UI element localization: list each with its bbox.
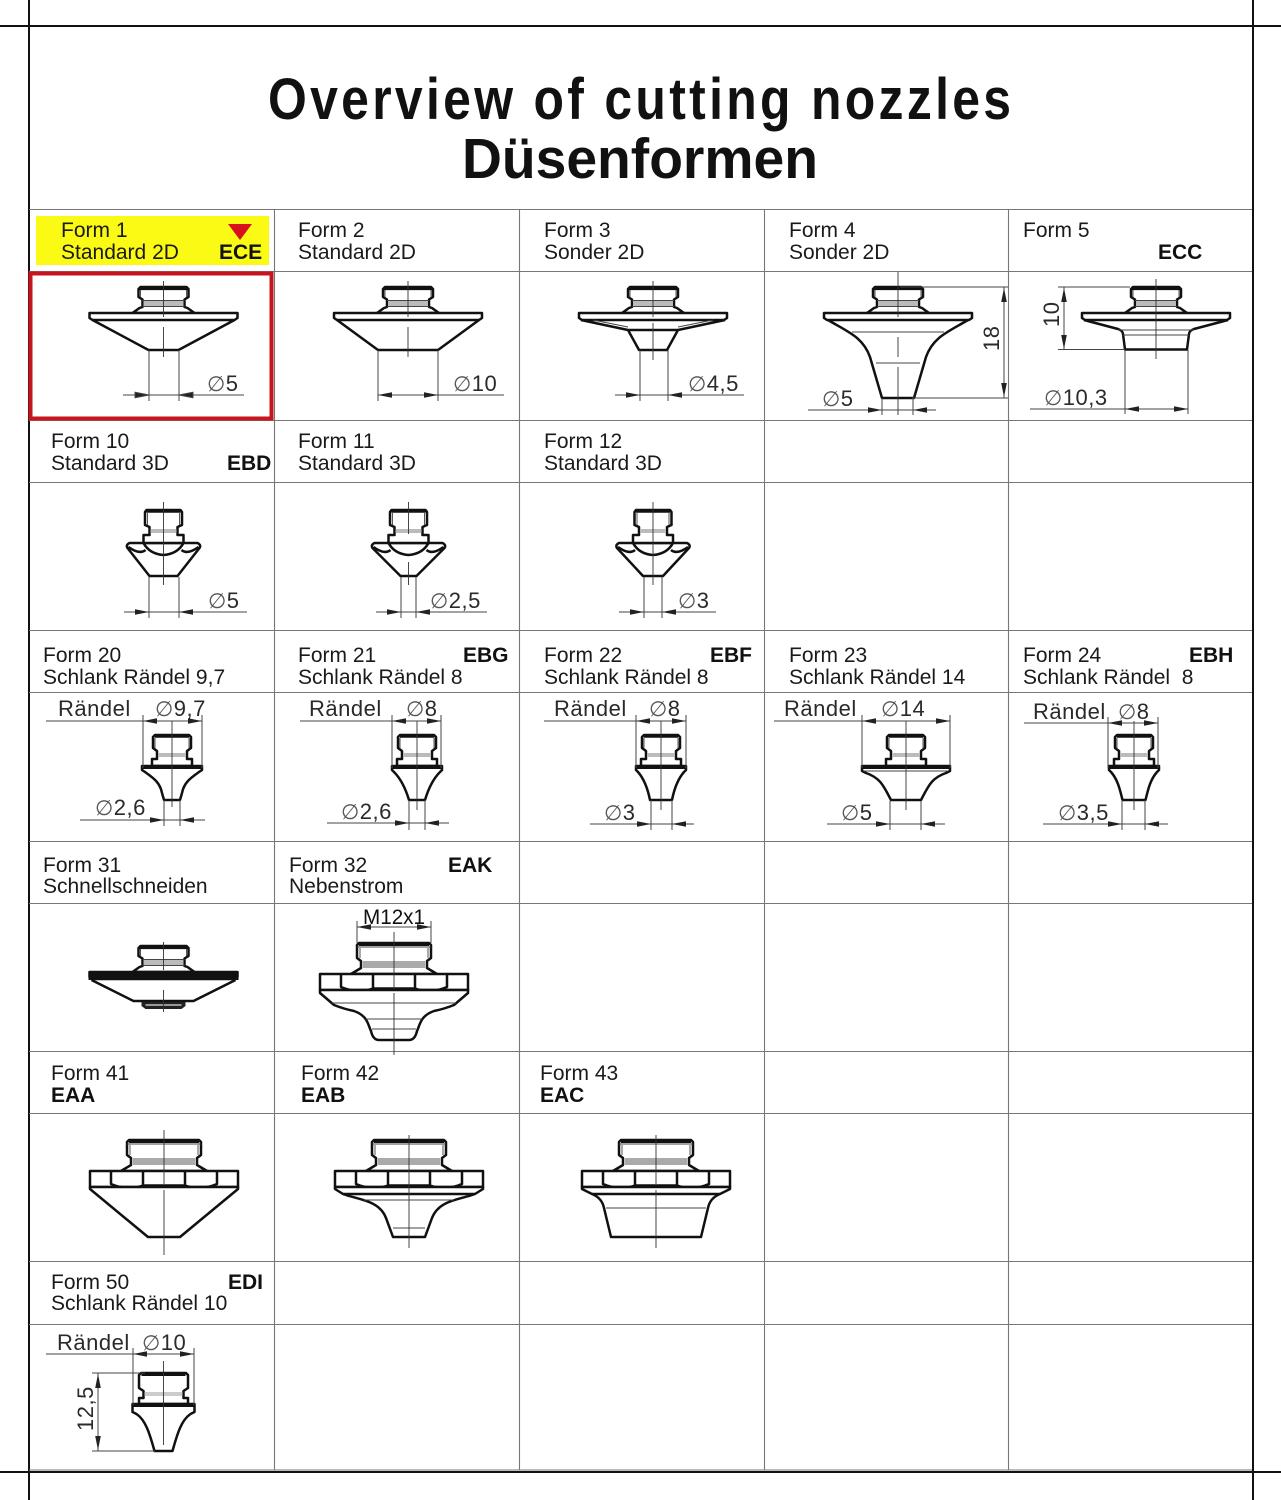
title: Overview of cutting nozzles <box>268 68 1011 132</box>
panel: Form 21: EBG <box>463 644 509 667</box>
panel: Form 23: Schlank Rändel 14 <box>789 666 966 689</box>
panel: Form 1: ∅5 <box>207 371 239 396</box>
panel: Form 24: EBH <box>1189 644 1233 667</box>
panel: Form 24 <box>1023 644 1233 830</box>
panel: Form 12: Form 12 <box>544 430 622 453</box>
panel: Form 3: Sonder 2D <box>544 241 644 264</box>
panel: Form 43: Form 43 <box>540 1062 618 1085</box>
panel: Form 41: Form 41 <box>51 1062 129 1085</box>
panel: Form 20: ∅9,7 <box>155 696 206 721</box>
panel: Form 32 <box>289 854 492 1055</box>
panel: Form 32: Nebenstrom <box>289 875 403 898</box>
panel: Form 50: EDI <box>228 1271 263 1294</box>
panel: Form 5: ∅10,3 <box>1044 385 1108 410</box>
panel: Form 10: Standard 3D <box>51 452 169 475</box>
panel: Form 20: Form 20 <box>43 644 121 667</box>
panel: Form 32: Form 32 <box>289 854 367 877</box>
panel: Form 21: ∅8 <box>406 696 438 721</box>
panel: Form 2 <box>298 219 504 401</box>
panel: Form 21: ∅2,6 <box>341 799 392 824</box>
panel: Form 23: Rändel <box>784 696 857 721</box>
panel: Form 1 <box>30 216 272 418</box>
panel: Form 20 <box>43 644 225 826</box>
panel: Form 21: Form 21 <box>298 644 376 667</box>
panel: Form 24: ∅8 <box>1118 699 1150 724</box>
panel: Form 22: EBF <box>710 644 752 667</box>
panel: Form 22: Rändel <box>554 696 627 721</box>
panel: Form 41 <box>51 1062 238 1255</box>
panel: Form 24: Form 24 <box>1023 644 1102 667</box>
panel: Form 1: ECE <box>219 241 262 264</box>
panel: Form 43: EAC <box>540 1084 584 1107</box>
panel: Form 23: ∅5 <box>841 800 873 825</box>
panel: Form 50: Form 50 <box>51 1271 129 1294</box>
panel: Form 5: Form 5 <box>1023 219 1090 242</box>
panel: Form 22: ∅3 <box>604 800 636 825</box>
panel: Form 43 <box>540 1062 730 1248</box>
panel: Form 31: Form 31 <box>43 854 121 877</box>
panel: Form 10: Form 10 <box>51 430 129 453</box>
panel: Form 21 <box>298 644 509 830</box>
panel: Form 22: ∅8 <box>649 696 681 721</box>
panel: Form 11: Form 11 <box>298 430 375 453</box>
panel: Form 1: Form 1 <box>61 219 128 242</box>
panel: Form 21: Rändel <box>309 696 382 721</box>
panel: Form 24: Schlank Rändel 8 <box>1023 666 1193 689</box>
panel: Form 11 <box>298 430 487 618</box>
panel: Form 3: Form 3 <box>544 219 611 242</box>
panel: Form 4: Sonder 2D <box>789 241 889 264</box>
title: Düsenformen <box>462 127 818 191</box>
panel: Form 21: Schlank Rändel 8 <box>298 666 463 689</box>
panel: Form 31 <box>43 854 238 1012</box>
panel: Form 4: 18 <box>979 326 1004 351</box>
panel: Form 10: EBD <box>227 452 271 475</box>
panel: Form 10: ∅5 <box>208 588 240 613</box>
panel: Form 32: EAK <box>448 854 492 877</box>
panel: Form 41: EAA <box>51 1084 95 1107</box>
panel: Form 23: Form 23 <box>789 644 867 667</box>
panel: Form 4 <box>789 219 1008 415</box>
panel: Form 5: 10 <box>1039 302 1064 327</box>
panel: Form 11: Standard 3D <box>298 452 416 475</box>
panel: Form 50: 12,5 <box>73 1386 98 1431</box>
panel: Form 3 <box>544 219 744 401</box>
panel: Form 5: ECC <box>1158 241 1202 264</box>
panel: Form 42: EAB <box>301 1084 345 1107</box>
panel: Form 32: M12x1 <box>363 906 425 929</box>
panel: Form 42 <box>301 1062 483 1248</box>
panel: Form 12: Standard 3D <box>544 452 662 475</box>
panel: Form 50: Rändel <box>57 1330 130 1355</box>
panel: Form 50: ∅10 <box>142 1330 186 1355</box>
panel: Form 12: ∅3 <box>678 588 710 613</box>
panel: Form 5 <box>1023 219 1230 414</box>
panel: Form 20: ∅2,6 <box>95 795 146 820</box>
panel: Form 20: Schlank Rändel 9,7 <box>43 666 225 689</box>
panel: Form 4: Form 4 <box>789 219 856 242</box>
panel: Form 10 <box>51 430 271 618</box>
panel: Form 50 <box>46 1271 263 1451</box>
panel: Form 42: Form 42 <box>301 1062 379 1085</box>
panel: Form 24: Rändel <box>1033 699 1106 724</box>
panel: Form 2: Standard 2D <box>298 241 416 264</box>
panel: Form 31: Schnellschneiden <box>43 875 208 898</box>
panel: Form 22: Schlank Rändel 8 <box>544 666 709 689</box>
panel: Form 2: Form 2 <box>298 219 365 242</box>
panel: Form 1: Standard 2D <box>61 241 179 264</box>
panel: Form 3: ∅4,5 <box>688 371 739 396</box>
panel: Form 50: Schlank Rändel 10 <box>51 1292 227 1315</box>
title <box>268 68 1011 191</box>
panel: Form 20: Rändel <box>58 696 131 721</box>
panel: Form 24: ∅3,5 <box>1058 800 1109 825</box>
panel: Form 11: ∅2,5 <box>430 588 481 613</box>
panel: Form 22: Form 22 <box>544 644 622 667</box>
panel: Form 23: ∅14 <box>881 696 925 721</box>
panel: Form 2: ∅10 <box>453 371 497 396</box>
panel: Form 22 <box>544 644 752 830</box>
panel: Form 12 <box>544 430 716 618</box>
panel: Form 23 <box>774 644 966 830</box>
panel: Form 4: ∅5 <box>822 386 854 411</box>
